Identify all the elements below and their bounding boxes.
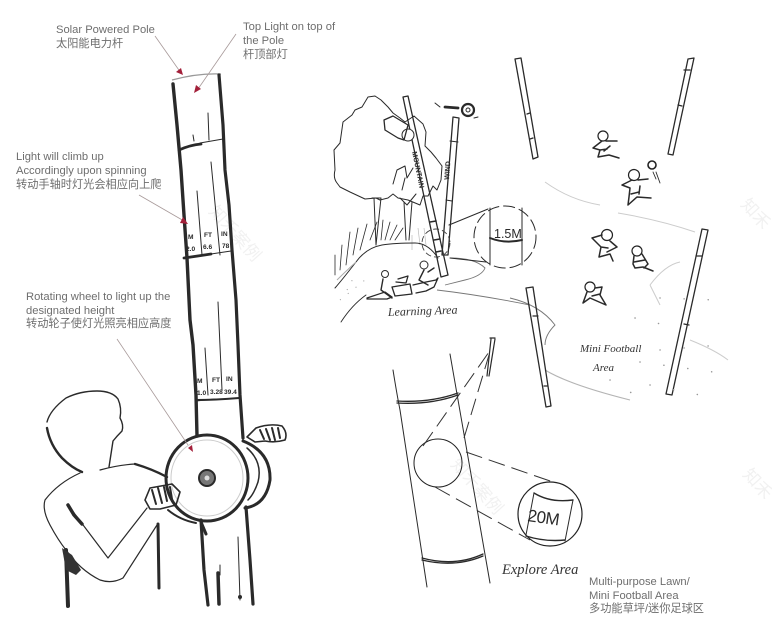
learning area scene: [334, 96, 536, 322]
zoom circle 1.5M: 1.5M: [494, 227, 522, 241]
middle height band: [184, 254, 211, 258]
label: solar powered pole: Solar Powered Pole: [56, 24, 155, 36]
people and benches: [367, 261, 438, 299]
label: multi-purpose lawn: Multi-purpose Lawn/: [589, 576, 691, 588]
watermarks: 知禾案例: [204, 199, 268, 266]
label: rotating wheel: Rotating wheel to light up the: [26, 291, 170, 303]
pole label: 1.0 M: IN: [226, 376, 233, 383]
pole A: [515, 58, 538, 159]
head: [47, 391, 123, 467]
label: light will climb: 转动手轴时灯光会相应向上爬: [16, 177, 161, 191]
watermarks: 知禾案例: [446, 452, 510, 519]
arrow: light climb: [139, 195, 188, 224]
zoom circle 1.5M: [422, 206, 536, 268]
label: solar powered pole: [56, 24, 155, 50]
ball: [648, 161, 660, 183]
main pole sketch: [44, 74, 286, 606]
main learning pole: [384, 96, 448, 277]
second learning pole with sign: WIND: [444, 161, 452, 180]
label: mini football area: [579, 343, 641, 374]
label: rotating wheel: designated height: [26, 305, 115, 317]
hair shadow: [47, 428, 82, 472]
second tree trunks: [372, 166, 416, 245]
label: mini football area: Area: [592, 362, 614, 374]
hedge strokes: [335, 220, 403, 275]
label: multi-purpose lawn: 多功能草坪/迷你足球区: [589, 601, 704, 615]
label: top light: Top Light on top of: [243, 21, 336, 33]
zoom circle 20M: [518, 482, 582, 546]
label: top light: the Pole: [243, 35, 284, 47]
main learning pole: MOUNTAIN: [410, 151, 425, 189]
lawn curves: [545, 182, 728, 360]
label: multi-purpose lawn: Mini Football Area: [589, 590, 679, 602]
gravel dots: [610, 298, 735, 398]
label: multi-purpose lawn: [589, 576, 704, 615]
label: light will climb: Light will climb up: [16, 151, 104, 163]
paths and ground: [437, 258, 530, 305]
player 1: [593, 131, 619, 158]
pole top cap: [172, 74, 221, 80]
pole label: 2.0 M: M: [188, 234, 194, 241]
pole label: 2.0 M: 2.0: [186, 246, 195, 253]
label: light will climb: Accordingly upon spinning: [16, 165, 147, 177]
rear wheel: [243, 441, 270, 508]
torso and back: [44, 473, 157, 582]
near hand: [145, 484, 180, 509]
label: light will climb: [16, 151, 161, 191]
lower pole: [201, 507, 253, 605]
mound: [335, 243, 438, 288]
legs: [66, 550, 68, 606]
pole label: 2.0 M: IN: [221, 231, 228, 238]
arrow: rotating wheel: [117, 339, 193, 452]
mini football area scene: [510, 58, 735, 407]
watermarks: [204, 192, 772, 519]
pole label: 1.0 M: M: [197, 378, 203, 385]
label: solar powered pole: 太阳能电力杆: [56, 36, 123, 50]
player 4: [632, 246, 653, 271]
far hand: [247, 425, 286, 442]
arrow: top light: [194, 34, 236, 93]
label: rotating wheel: 转动轮子使灯光照亮相应高度: [26, 316, 171, 330]
pole left edge: [173, 84, 197, 436]
arm crease: [68, 505, 147, 558]
pole label: 2.0 M: FT: [204, 232, 212, 239]
label: learning area: Learning Area: [387, 303, 458, 319]
pole label: 1.0 M: FT: [212, 377, 220, 384]
second learning pole with sign: [435, 103, 478, 255]
zoom circle 20M: 20M: [526, 506, 560, 529]
footballers: [583, 131, 660, 305]
pole label: 1.0 M: 39.4: [224, 389, 237, 396]
pole scale lines: [193, 113, 222, 395]
lower height band: [196, 398, 239, 400]
player 5: [583, 282, 606, 305]
player 3: [592, 230, 617, 261]
label: rotating wheel: [26, 291, 171, 330]
pole label: 1.0 M: 3.28: [210, 389, 223, 396]
pole label: 2.0 M: 78: [222, 243, 230, 250]
pole label: 2.0 M: [186, 231, 230, 253]
explore area sketch: [393, 338, 582, 587]
wheel: [166, 435, 248, 521]
pole C: [666, 229, 708, 395]
pole B: [668, 58, 694, 155]
dashed sight lines: [423, 352, 553, 540]
wheel brace: [168, 510, 196, 523]
small distant pole: [487, 338, 495, 376]
arrow: solar pole: [155, 36, 183, 75]
pole bands: [397, 393, 483, 563]
pole right edge: [219, 75, 243, 438]
tree crown: [334, 96, 442, 205]
view circle: [414, 439, 462, 487]
label: top light: 杆顶部灯: [243, 47, 288, 61]
pole D: [526, 287, 551, 407]
pole label: 1.0 M: [197, 376, 237, 397]
label: mini football area: Mini Football: [579, 343, 641, 355]
pole edges: [393, 354, 490, 587]
upper height band: [179, 144, 201, 150]
pole label: 1.0 M: 1.0: [197, 390, 206, 397]
pole label: 2.0 M: 6.6: [203, 244, 212, 251]
label: top light: [243, 21, 336, 61]
player 2: [622, 170, 651, 205]
person: [44, 391, 196, 606]
shoulder: [100, 464, 135, 470]
label: explore area: Explore Area: [501, 562, 578, 578]
